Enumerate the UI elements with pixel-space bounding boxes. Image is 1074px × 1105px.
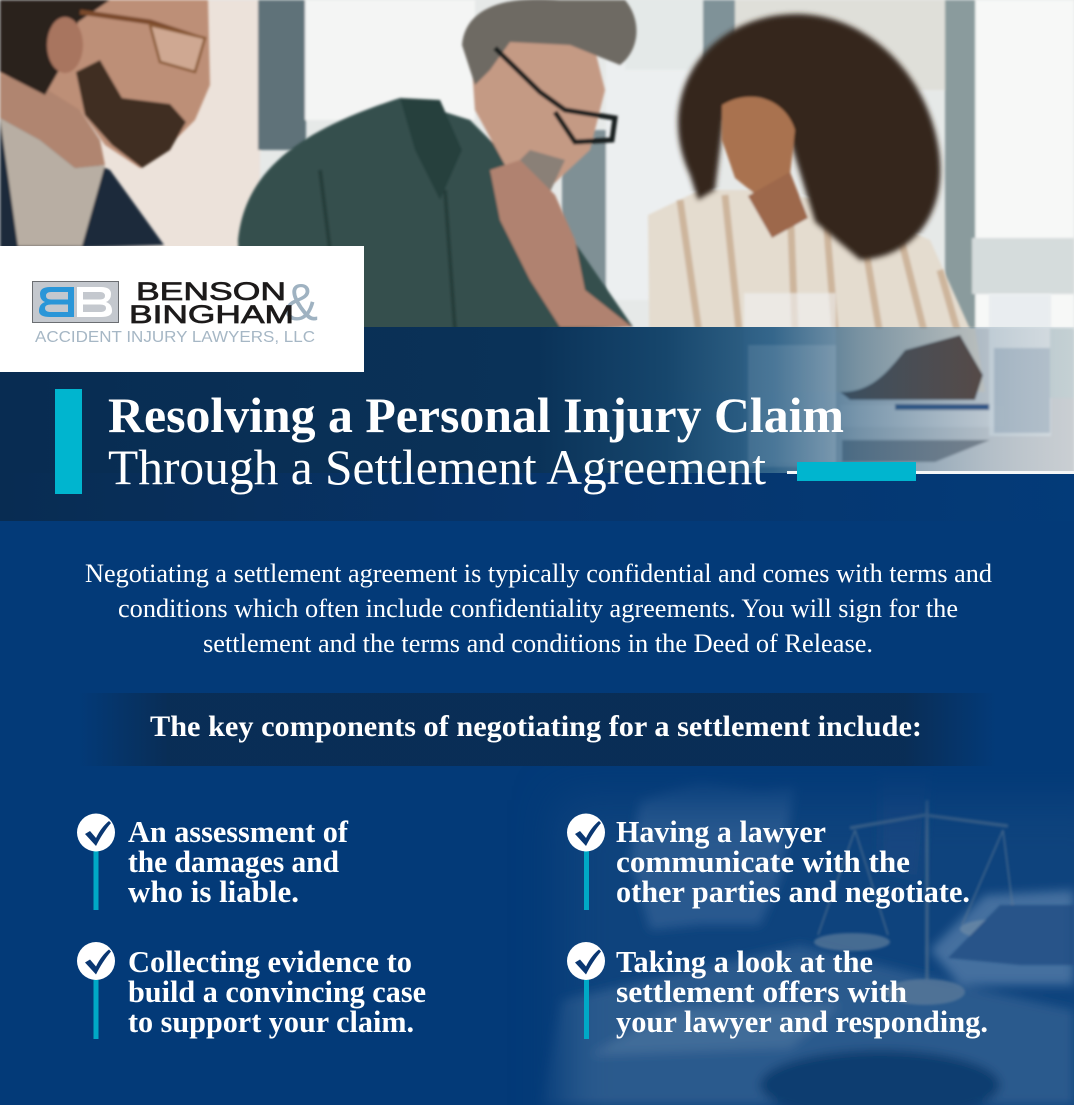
item text 1: the damages and bbox=[128, 845, 339, 879]
logo: ampersand: & bbox=[284, 274, 318, 332]
hero photo: three people at a table bbox=[0, 0, 1074, 473]
intro paragraph: settlement and the terms and conditions in the Deed of Release. bbox=[203, 628, 873, 658]
item text 3 bbox=[616, 815, 970, 909]
title bbox=[108, 387, 844, 495]
table and glasses bbox=[620, 293, 1074, 473]
key components banner bbox=[78, 693, 996, 766]
background photo: scales of justice, handshake, laptop bbox=[546, 786, 1074, 1105]
logo: tagline: ACCIDENT INJURY LAWYERS, LLC bbox=[35, 329, 315, 346]
logo: BB mark bbox=[32, 282, 118, 322]
checkmark pin 3 bbox=[567, 814, 605, 910]
list item 4 bbox=[567, 942, 988, 1039]
item text 2: to support your claim. bbox=[128, 1005, 414, 1039]
title: Through a Settlement Agreement bbox=[108, 439, 766, 495]
checkmark pin 2 bbox=[77, 942, 115, 1039]
logo panel bbox=[0, 246, 364, 372]
item text 1: An assessment of bbox=[128, 815, 349, 849]
item text 1 bbox=[128, 815, 349, 909]
item text 2 bbox=[128, 945, 426, 1039]
logo: firm name: BINGHAM bbox=[129, 301, 294, 329]
item text 1: who is liable. bbox=[128, 875, 299, 909]
left man bbox=[0, 0, 210, 250]
list item 1 bbox=[77, 814, 349, 910]
logo: firm name: BENSON bbox=[136, 278, 286, 306]
glass seen through the overlay bbox=[748, 345, 836, 467]
white rule under the photo bbox=[905, 471, 1074, 474]
list item 3 bbox=[567, 814, 970, 910]
item text 4: your lawyer and responding. bbox=[616, 1005, 988, 1039]
item text 4: Taking a look at the bbox=[616, 945, 873, 979]
item text 3: communicate with the bbox=[616, 845, 910, 879]
checkmark pin 1 bbox=[77, 814, 115, 910]
item text 4: settlement offers with bbox=[616, 975, 907, 1009]
item text 3: Having a lawyer bbox=[616, 815, 826, 849]
item text 2: Collecting evidence to bbox=[128, 945, 412, 979]
item text 4 bbox=[616, 945, 988, 1039]
intro paragraph bbox=[85, 558, 992, 658]
intro paragraph: conditions which often include confidentiality agreements. You will sign for the bbox=[118, 593, 958, 623]
title accent bar bbox=[55, 389, 82, 494]
woman bbox=[647, 10, 970, 329]
checkmark pin 4 bbox=[567, 942, 605, 1039]
dark overlay band across the photo bbox=[0, 327, 1074, 473]
middle man bbox=[238, 0, 636, 340]
lower header band bbox=[0, 473, 1074, 521]
list item 2 bbox=[77, 942, 426, 1039]
banner heading: The key components of negotiating for a settlement include: bbox=[150, 710, 922, 743]
item text 2: build a convincing case bbox=[128, 975, 426, 1009]
logo: firm name bbox=[129, 278, 294, 329]
intro paragraph: Negotiating a settlement agreement is typically confidential and comes with terms and bbox=[85, 558, 992, 588]
item text 3: other parties and negotiate. bbox=[616, 875, 970, 909]
window frames bbox=[100, 0, 1074, 330]
title accent rule bbox=[787, 462, 916, 481]
title: Resolving a Personal Injury Claim bbox=[108, 387, 844, 443]
